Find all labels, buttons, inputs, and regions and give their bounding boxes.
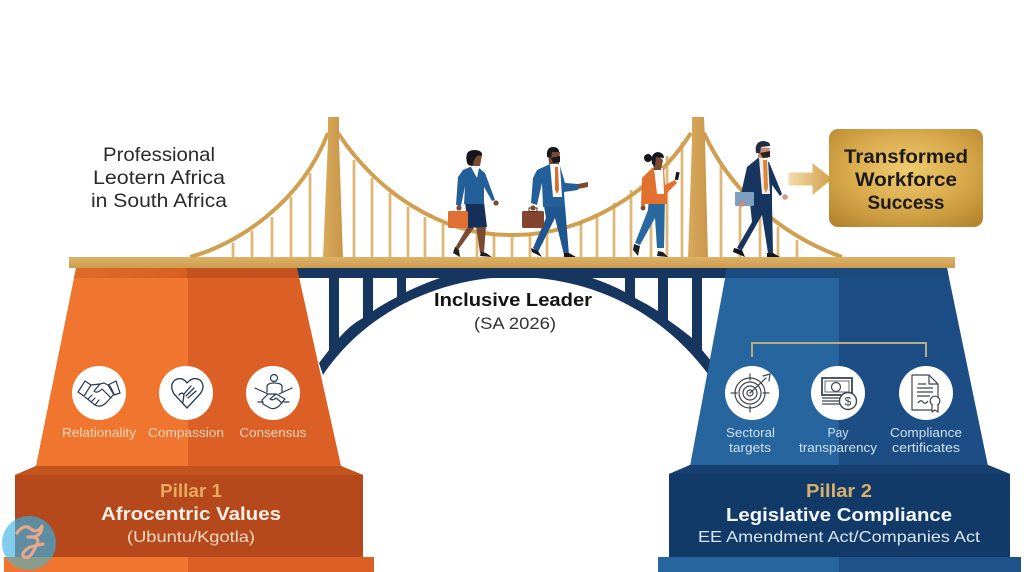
pillar 1 icon labels: Relationality — [62, 426, 137, 440]
figure: woman in orange jacket with phone — [633, 152, 680, 257]
arrow to outcome box — [788, 162, 833, 196]
icon: compliance certificate — [899, 366, 953, 420]
figure: man in navy suit with folder — [733, 141, 788, 257]
left text: Professional Leotern Africa in South Africa: Professional — [103, 144, 215, 166]
pillar 2 icon labels: Pay — [828, 426, 849, 440]
icon: pay transparency: $ — [845, 394, 852, 408]
pillar 2 icon labels: Compliance — [890, 426, 962, 440]
bridge label: Inclusive Leader (SA 2026): Inclusive Leader — [434, 289, 592, 310]
icon: target — [725, 366, 779, 420]
pillar 2 icon labels: transparency — [799, 441, 878, 455]
outcome box: Transformed Workforce Success: Success — [868, 192, 945, 214]
left text: Professional Leotern Africa in South Africa — [91, 144, 227, 212]
pillar 2 icon labels: targets — [729, 441, 771, 455]
right pier: Pillar 2 — [658, 268, 1021, 572]
pillar 2 heading: EE Amendment Act/Companies Act — [698, 529, 981, 546]
pillar 2 icon labels: certificates — [892, 441, 960, 455]
bridge label: Inclusive Leader (SA 2026) — [434, 289, 592, 333]
left text: Professional Leotern Africa in South Africa: Leotern Africa — [93, 167, 225, 189]
left pier: Pillar 1 — [4, 268, 374, 572]
pillar 1 heading — [101, 481, 281, 546]
outcome box: Transformed Workforce Success — [829, 129, 983, 227]
figure: man with brown briefcase — [522, 147, 588, 257]
left text: Professional Leotern Africa in South Africa: in South Africa — [91, 190, 227, 212]
icon: consensus — [246, 366, 300, 420]
pillar 2 heading — [698, 481, 981, 546]
outcome box: Transformed Workforce Success: Transformed — [844, 146, 968, 168]
pillar 2 heading: Pillar 2 — [806, 481, 872, 501]
pillar 1 heading: Pillar 1 — [160, 481, 222, 501]
pillar 2 icon labels: Sectoral — [726, 426, 775, 440]
pillar 2 icon labels — [726, 426, 962, 455]
arch under the deck — [295, 267, 729, 375]
icon: handshake — [72, 366, 126, 420]
pillar 2 heading: Legislative Compliance — [726, 504, 952, 525]
icon: watermark logo — [2, 516, 56, 570]
icon: pay transparency — [811, 366, 865, 420]
suspension bridge: cables and hangers — [190, 133, 842, 258]
bridge deck — [69, 257, 955, 268]
pillar 1 icon labels — [62, 426, 306, 440]
pillar 1 heading: Afrocentric Values — [101, 503, 281, 524]
icon: heart with hand — [159, 366, 213, 420]
pillar 1 icon labels: Consensus — [240, 426, 306, 440]
pillar 1 heading: (Ubuntu/Kgotla) — [127, 529, 255, 546]
outcome box: Transformed Workforce Success: Workforce — [855, 169, 957, 191]
bracket linking compliance icons — [752, 343, 926, 357]
right tower — [688, 117, 708, 258]
left tower — [323, 117, 343, 258]
infographic: bridge between two pillars — [2, 117, 1021, 572]
pillar 1 icon labels: Compassion — [148, 426, 224, 440]
figure: woman with orange bag — [448, 150, 499, 257]
bridge label: Inclusive Leader (SA 2026): (SA 2026) — [474, 314, 556, 333]
